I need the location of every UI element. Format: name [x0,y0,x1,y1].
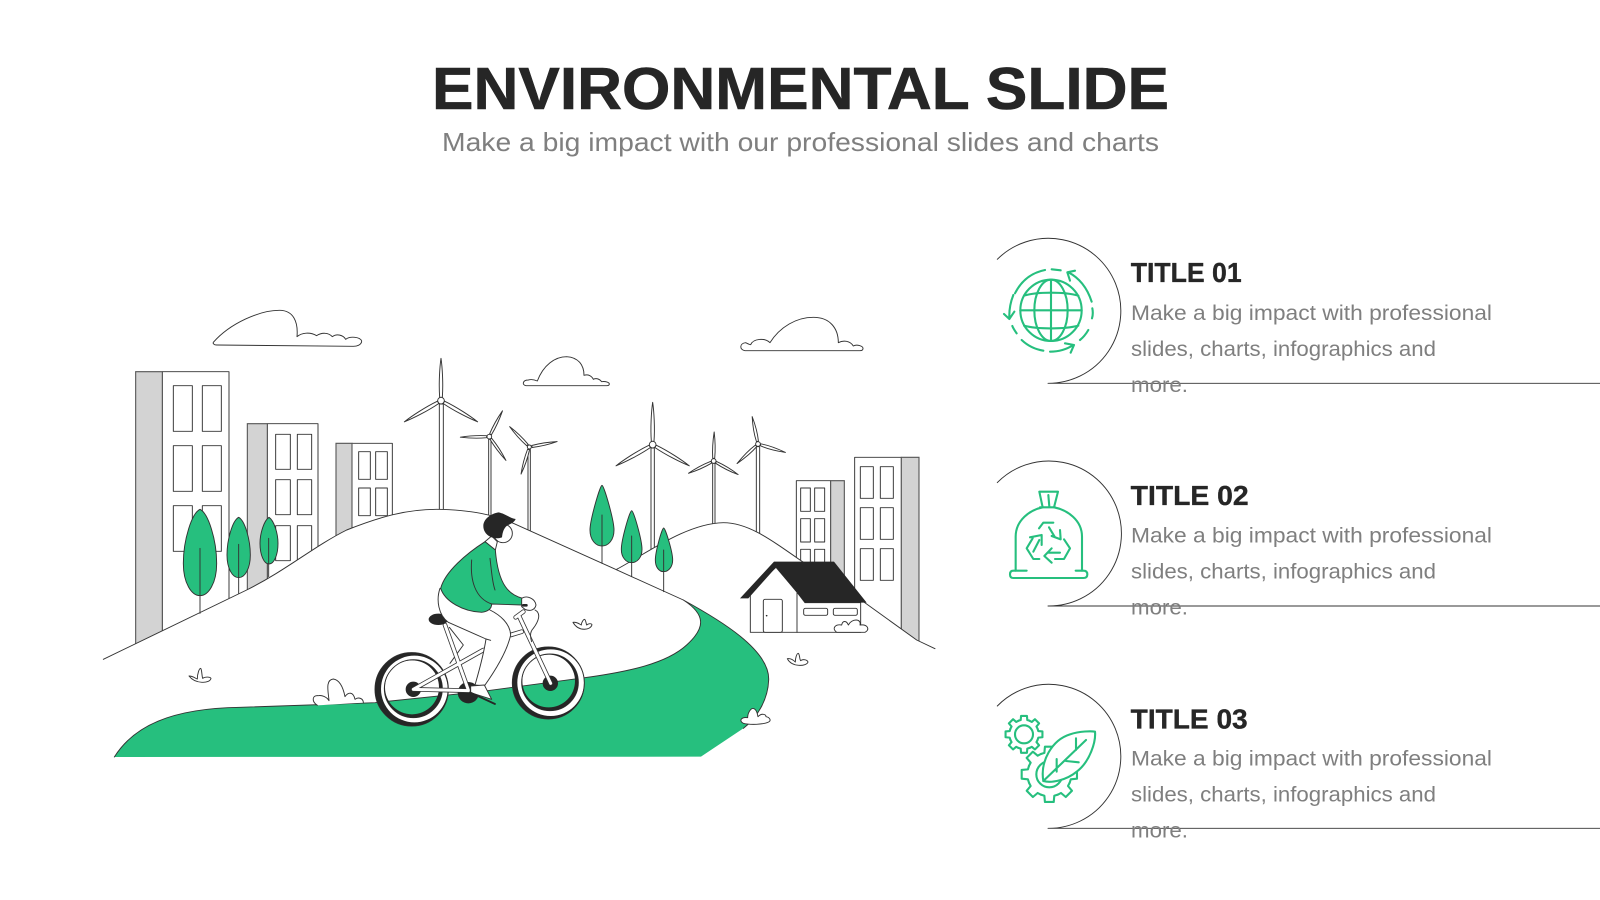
text 03: Make a big impact with professional [1131,748,1492,770]
text 03: slides, charts, infographics and [1131,784,1436,806]
text 02: slides, charts, infographics and [1131,560,1436,584]
turbine 2 [460,410,507,523]
cyclist [375,512,584,726]
building 1 [136,372,229,648]
heading 01: TITLE 01 [1131,257,1242,288]
arc and rule 01 [997,238,1600,383]
tree 3 [260,517,278,577]
building 3 [336,443,392,543]
head [494,524,512,543]
text 02 [1131,524,1492,620]
hubs [406,682,421,697]
hand [522,597,536,610]
hair [483,512,516,538]
turbine 5 [688,432,739,527]
pedal [458,682,479,703]
tree 5 [621,511,642,577]
arc and rule 03 [997,684,1600,828]
saddle [429,614,448,625]
item 02 [997,461,1600,620]
cloud left [213,310,362,346]
heading 02: TITLE 02 [1131,480,1249,511]
plant centre [573,619,592,629]
tree 4 [590,485,614,563]
subtitle: Make a big impact with our professional slides and charts [442,127,1159,157]
shoe [471,685,495,704]
front wheel [512,647,584,719]
icon: globe with recycling arrows [1004,269,1093,353]
icon: gears and leaf [1006,716,1095,802]
hill left [103,509,703,767]
tree 2 [227,517,250,593]
back wheel [375,653,448,726]
building 4 [796,481,844,581]
item 03 [997,684,1600,842]
cloud middle [523,357,609,386]
icon: recycling bag [1010,492,1087,578]
cloud right [741,317,863,351]
text 02: Make a big impact with professional [1131,524,1492,548]
text 01: more. [1131,374,1188,397]
arc and rule 02 [997,461,1600,606]
trousers [438,588,511,686]
building 2 [247,424,318,597]
bike frame [413,610,551,691]
house [740,562,868,632]
text 01: Make a big impact with professional [1131,302,1492,325]
illustration: city, turbines and cyclist [103,310,935,767]
turbine 6 [736,416,786,537]
sweater [441,542,523,612]
tree 6 [655,528,673,592]
collar [485,536,497,550]
turbine 3 [509,426,557,536]
green road [114,600,769,757]
text 01: slides, charts, infographics and [1131,338,1436,361]
text 02: more. [1131,596,1188,620]
bush left [313,679,363,705]
item 01 [997,238,1600,397]
plant right [787,653,808,665]
text 03: more. [1131,820,1188,842]
title: ENVIRONMENTAL SLIDE [432,56,1169,122]
text 03 [1131,748,1492,842]
turbine 1 [403,358,479,514]
tree 1 [183,509,217,613]
plant left [189,668,211,682]
hill right [617,523,935,767]
heading 03: TITLE 03 [1131,703,1248,734]
text 01 [1131,302,1492,397]
building 5 [855,457,919,644]
bush road edge [741,708,770,724]
turbine 4 [615,402,690,555]
